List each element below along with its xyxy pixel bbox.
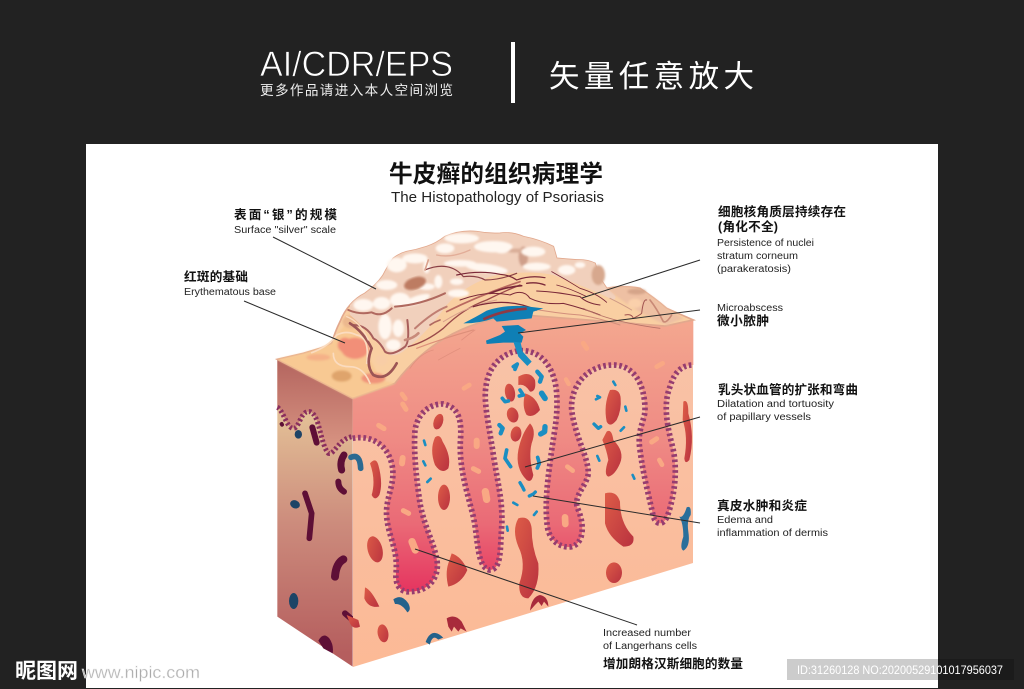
langerhans cells [379, 343, 663, 550]
dark blue and maroon cells [351, 456, 691, 643]
cream scale blobs [353, 233, 585, 351]
title: 牛皮癣的组织病理学 [389, 161, 603, 188]
label: langerhans cells: of Langerhans cells [603, 641, 697, 652]
brown patch [402, 274, 428, 293]
title [389, 161, 604, 206]
label: parakeratosis: (parakeratosis) [717, 264, 791, 275]
title: The Histopathology of Psoriasis [391, 189, 604, 206]
right mound tan shading [505, 247, 683, 325]
label: microabscess [518, 303, 783, 333]
label: erythematous base [184, 269, 345, 343]
label: edema: Edema and [717, 515, 773, 526]
label: parakeratosis: Persistence of nuclei [717, 238, 814, 249]
top surface and silver scale mound [277, 231, 693, 398]
label: parakeratosis: stratum corneum [717, 251, 798, 262]
label: papillary vessels: Dilatation and tortuosity [717, 399, 834, 410]
header: format heading: 更多作品请进入本人空间浏览 [260, 82, 453, 98]
label: langerhans cells: 增加朗格汉斯细胞的数量 [603, 656, 743, 671]
watermark: site logo: 昵图网 [15, 660, 78, 683]
label: edema: 真皮水肿和炎症 [717, 498, 807, 513]
label: parakeratosis: (角化不全) [718, 219, 778, 234]
label: edema [533, 496, 828, 539]
epidermis with rete ridges [353, 315, 693, 592]
label: erythematous base: Erythematous base [184, 287, 276, 298]
label: papillary vessels [525, 382, 858, 467]
label: edema: inflammation of dermis [717, 528, 828, 539]
white panel [86, 144, 938, 688]
label: microabscess: Microabscess [717, 303, 783, 314]
parakeratosis wavy lines [457, 272, 672, 328]
front face of block [353, 315, 693, 667]
header: format heading: AI/CDR/EPS [260, 44, 453, 84]
inflammatory cells [423, 364, 634, 531]
left face of block [277, 359, 353, 667]
label: papillary vessels: of papillary vessels [717, 412, 811, 423]
label: langerhans cells: Increased number [603, 628, 692, 639]
label: papillary vessels: 乳头状血管的扩张和弯曲 [718, 382, 858, 397]
label: langerhans cells [415, 549, 743, 671]
label: surface silver scale: Surface "silver" scale [234, 225, 336, 236]
watermark: image id: ID:31260128 NO:20200529101017956037 [797, 663, 1003, 677]
label: parakeratosis [582, 204, 846, 298]
label: parakeratosis: 细胞核角质层持续存在 [718, 204, 846, 219]
skin block diagram [277, 231, 693, 667]
cream scale zone [350, 231, 616, 355]
blood vessels [347, 374, 692, 643]
watermark: image id [787, 659, 1014, 680]
watermark: site logo [15, 660, 200, 683]
header: scaling text: 矢量任意放大 [549, 60, 754, 94]
watermark: site logo: www.nipic.com [81, 663, 200, 682]
label: erythematous base: 红斑的基础 [184, 269, 248, 284]
lower band lines and creases [347, 250, 520, 377]
label: surface silver scale: 表面“银”的规模 [234, 207, 337, 222]
label: microabscess: 微小脓肿 [717, 313, 769, 328]
label: surface silver scale [234, 207, 376, 289]
microabscess [463, 306, 543, 366]
header: divider bar [511, 42, 515, 103]
erythema blotches [277, 315, 395, 398]
